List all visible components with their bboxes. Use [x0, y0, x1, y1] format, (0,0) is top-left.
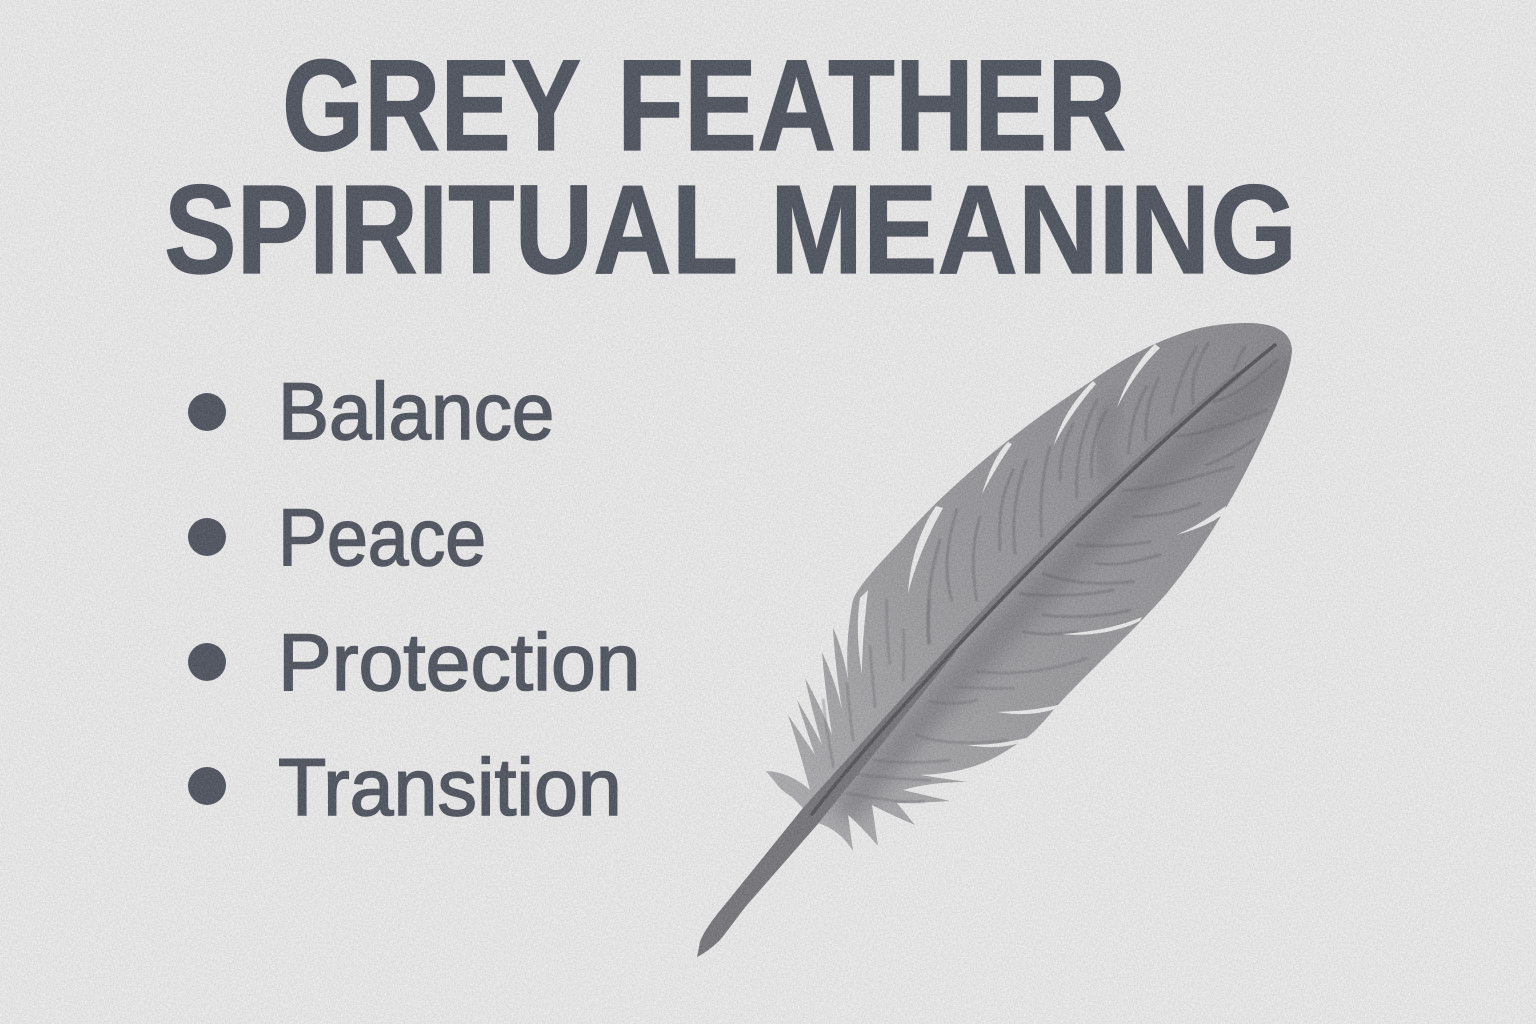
item: protection: Protection: [278, 618, 641, 708]
vane shading: [842, 361, 1294, 816]
title line 1: [282, 32, 1126, 178]
title line 1: GREY: [282, 32, 581, 178]
list of meanings: [188, 367, 641, 833]
title line 1: FEATHER: [617, 32, 1126, 178]
feather vane: [766, 323, 1292, 851]
barb lines lower: [823, 600, 1087, 802]
rachis dark line: [812, 345, 1275, 814]
item: peace: [188, 493, 486, 583]
item: balance: Balance: [278, 367, 554, 457]
barb lines upper: [928, 343, 1277, 643]
title: [164, 32, 1297, 300]
title line 2: MEANING: [770, 159, 1297, 300]
rachis: [950, 374, 1240, 650]
feather notches: [858, 344, 1226, 747]
item: peace: Peace: [278, 493, 486, 583]
title line 2: [164, 159, 1297, 300]
item: transition: Transition: [278, 743, 622, 833]
title line 2: SPIRITUAL: [164, 159, 738, 300]
icon: grey feather: [697, 323, 1292, 957]
quill: [697, 645, 956, 957]
